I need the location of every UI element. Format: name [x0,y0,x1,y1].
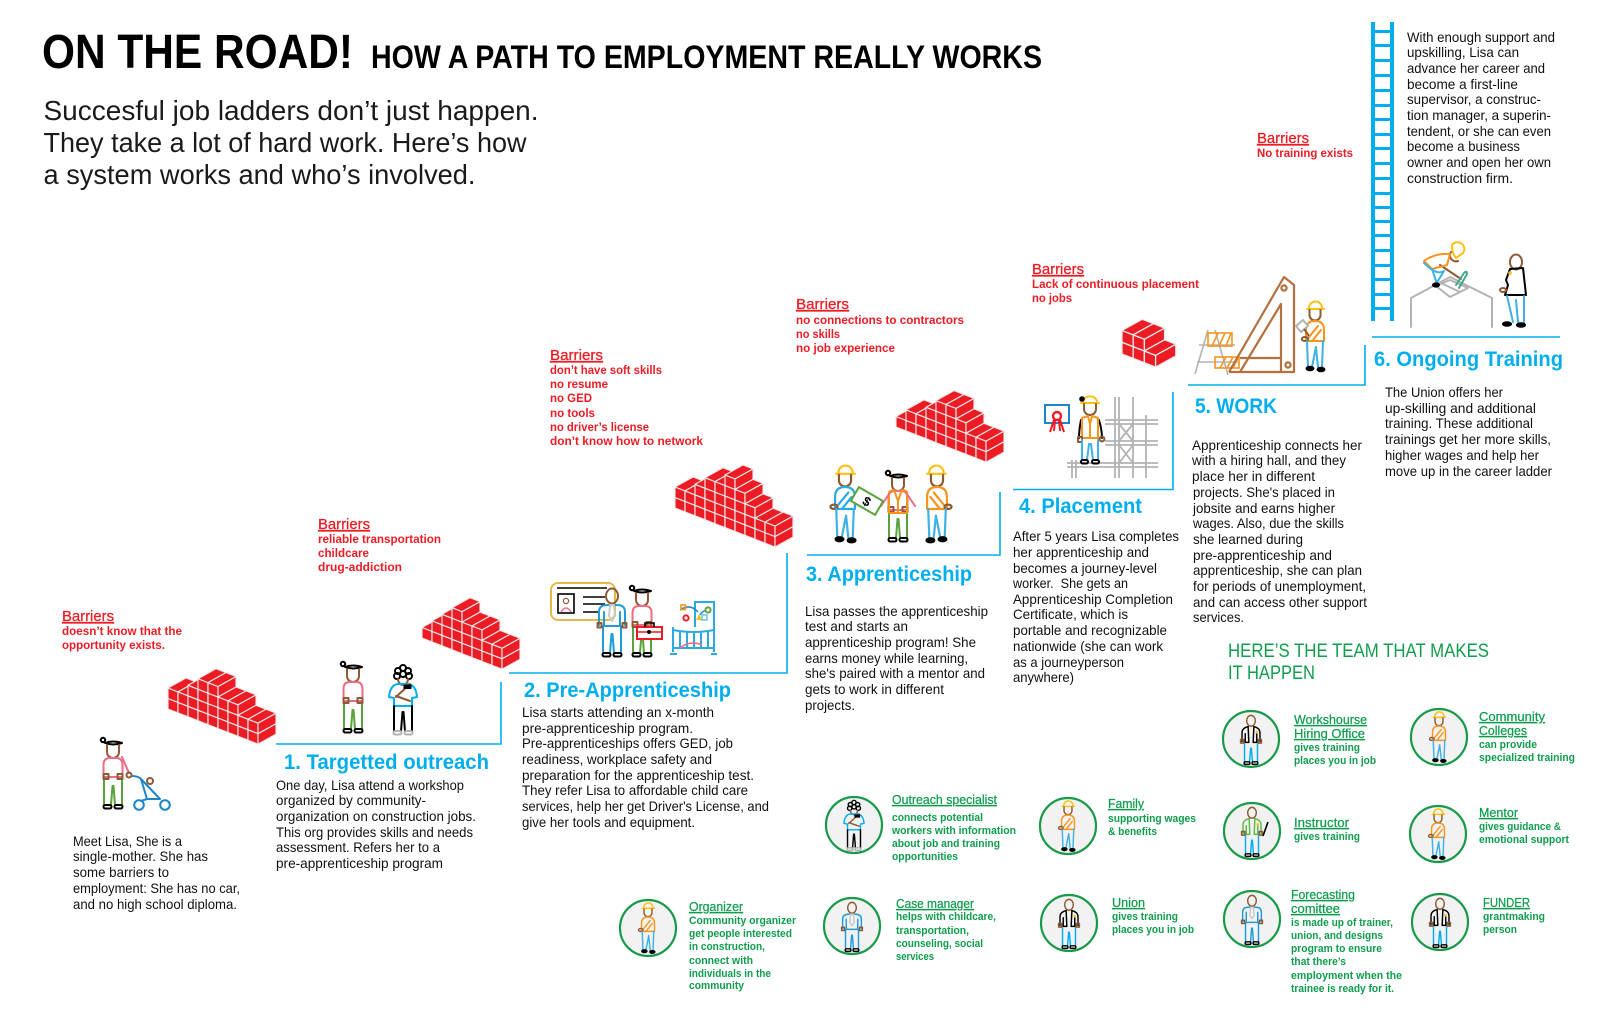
text: step 2: preparation for the apprenticeship test. [522,767,754,783]
barriers: step 4: Barriers [1032,261,1084,278]
barriers: step 2: no GED [550,393,592,405]
text: step 1: pre-apprenticeship program [276,855,443,871]
text: career advance: With enough support and [1407,29,1555,45]
team: funder [1412,894,1545,950]
text: step 1: This org provides skills and needs [276,824,473,840]
text: step 1: assessment. Refers her to a [276,839,440,855]
brick wall 2 [675,465,793,547]
text: step 4: Certificate, which is [1013,606,1128,622]
team: outreach specialist: workers with information [891,825,1016,837]
icon: crib with mobile [670,602,717,654]
team heading: IT HAPPEN [1228,663,1315,684]
team heading [1228,641,1489,684]
text: meet Lisa [73,833,240,912]
text: meet Lisa: employment: She has no car, [73,880,240,896]
team: organizer: get people interested [689,928,792,940]
text: step 4: nationwide (she can work [1013,638,1164,654]
text: career advance: owner and open her own [1407,154,1551,170]
text: career advance: become a first-line [1407,76,1518,92]
step line 3 [807,492,1000,555]
panel: step 3 apprenticeship [796,296,1004,713]
panel: meet Lisa [62,608,276,912]
text: step 2 [522,704,769,830]
text: career advance: construction firm. [1407,170,1513,186]
text: step 5: wages. Also, due the skills [1192,515,1344,531]
text: step 6: The Union offers her [1385,384,1503,400]
text: step 2: services, help her get Driver's License, and [522,798,769,814]
icon: Lisa with stroller [101,738,170,810]
team: community colleges: Colleges [1479,723,1527,738]
barriers: step 6: No training exists [1257,148,1353,160]
barriers: opportunity: opportunity exists. [62,640,165,652]
team: forecasting comittee: Forecasting [1291,887,1355,902]
brick wall 1 [422,598,520,669]
barriers: step 2: no driver’s license [550,422,649,434]
team: forecasting comittee: employment when the [1291,970,1402,982]
team: mentor: emotional support [1479,834,1569,846]
barriers: step 1 [318,516,441,574]
text: step 2: readiness, workplace safety and [522,751,712,767]
brick wall 3 [896,391,1004,462]
text: step 2: Pre-apprenticeships offers GED, job [522,735,733,751]
team: union: Union [1112,895,1145,910]
barriers: step 4: no jobs [1032,293,1072,305]
icon: certificate [1045,405,1069,432]
text: step 1: organization on construction jobs. [276,808,476,824]
text: step 5: services. [1193,609,1244,625]
team: family: supporting wages [1108,813,1196,825]
barriers: step 3: no job experience [796,343,895,355]
barriers: step 1: reliable transportation [318,534,441,546]
barriers: step 3 [796,296,964,355]
text: step 3: projects. [805,697,855,713]
text: step 2: They refer Lisa to affordable child care [522,782,748,798]
step line 6 [1372,336,1560,338]
team: case manager: services [896,951,934,963]
text: meet Lisa: Meet Lisa, She is a [73,833,182,849]
team: organizer: connect with [689,955,753,967]
team: instructor [1224,803,1360,859]
text: step 3: Lisa passes the apprenticeship [805,603,988,619]
text: step 5: place her in different [1192,468,1315,484]
text: step 6: trainings get her more skills, [1385,431,1551,447]
icon: timber brace [1229,277,1294,372]
text: step 5: with a hiring hall, and they [1191,452,1346,468]
barriers: step 6 [1257,130,1353,160]
text: step 5: she learned during [1193,531,1303,547]
text: step 4: Apprenticeship Completion [1013,591,1173,607]
text: career advance [1407,29,1555,186]
text: career advance: tion manager, a superin- [1407,107,1551,123]
icon: barricade [1195,330,1239,375]
panel: step 6 ongoing training [1257,22,1563,479]
icon: ID card [551,583,615,620]
team: forecasting comittee: trainee is ready for it. [1291,983,1394,995]
icon: scaffold [1067,397,1158,478]
team: forecasting comittee: program to ensure [1291,943,1382,955]
team: workshourse hiring office: gives training [1294,742,1360,754]
text: meet Lisa: single-mother. She has [73,848,208,864]
text: step 3: she's paired with a mentor and [805,665,985,681]
team: organizer: community [689,980,745,992]
heading 6: 6. Ongoing Training [1374,348,1563,371]
step line 5 [1188,345,1365,385]
team heading: HERE’S THE TEAM THAT MAKES [1228,641,1489,662]
brick wall 0 [168,669,276,744]
team: forecasting comittee: union, and designs [1291,930,1383,942]
brick wall 4 [1122,319,1176,367]
icon: roofer and supervisor [1411,242,1526,327]
heading 1: 1. Targetted outreach [284,751,489,774]
barriers: step 3: no connections to contractors [796,315,964,327]
team: family: & benefits [1108,826,1157,838]
barriers: opportunity: doesn’t know that the [62,626,182,638]
icon: handshake with pay [830,466,952,542]
team: instructor: Instructor [1294,815,1350,830]
title: ON THE ROAD! [42,26,353,79]
text: meet Lisa: and no high school diploma. [73,896,237,912]
text: career advance: tendent, or she can even [1407,123,1551,139]
team: funder: FUNDER [1483,895,1530,910]
text: step 5: and can access other support [1193,594,1367,610]
team: community colleges: can provide [1479,739,1537,751]
text: step 4: After 5 years Lisa completes [1013,528,1179,544]
team: community colleges: Community [1479,709,1545,724]
text: step 6: higher wages and help her [1385,447,1539,463]
step line 1 [276,682,501,744]
team: forecasting comittee: comittee [1291,901,1340,916]
team: workshourse hiring office: Workshourse [1294,712,1367,727]
team: funder: grantmaking [1483,911,1545,923]
team: forecasting comittee: that there’s [1291,956,1346,968]
heading 4: 4. Placement [1019,495,1142,518]
text: step 1 [276,777,476,871]
title: HOW A PATH TO EMPLOYMENT REALLY WORKS [371,39,1042,75]
team: community colleges: specialized training [1479,752,1575,764]
text: step 5: apprenticeship, she can plan [1193,562,1362,578]
team: case manager: counseling, social [896,938,983,950]
text: career advance: upskilling, Lisa can [1407,44,1519,60]
team: union [1041,895,1194,951]
text: step 4: anywhere) [1013,669,1074,685]
text: step 3: gets to work in different [805,681,944,697]
text: step 5 [1191,437,1367,625]
text: step 2: Lisa starts attending an x-month [522,704,714,720]
team: organizer: in construction, [689,941,765,953]
barriers: step 1: childcare [318,548,369,560]
text: step 4: portable and recognizable [1013,622,1167,638]
barriers: step 2: don’t have soft skills [550,365,662,377]
barriers: step 1: drug-addiction [318,562,402,574]
team: mentor: Mentor [1479,805,1519,820]
text: step 4: worker. She gets an [1012,575,1128,591]
text: step 3 [805,603,988,713]
team: mentor [1410,805,1569,862]
team: family: Family [1108,796,1144,811]
heading 5: 5. WORK [1195,395,1277,418]
team: community colleges [1411,709,1575,765]
team: outreach specialist: about job and training [892,838,1000,850]
team: case manager: transportation, [896,925,969,937]
barriers: step 2 [550,347,704,448]
text: step 5: for periods of unemployment, [1193,578,1366,594]
barriers: step 3: no skills [796,329,840,341]
panel: step 1 targetted outreach [276,516,520,871]
text: step 5: jobsite and earns higher [1192,500,1335,516]
intro text [44,95,538,190]
barriers: step 2: no tools [550,408,595,420]
barriers: step 4 [1032,261,1199,305]
team: workshourse hiring office: Hiring Office [1294,726,1365,741]
icon: journey-level worker [1078,396,1104,464]
team: outreach specialist: Outreach specialist [892,792,997,807]
text: step 4 [1012,528,1179,685]
text: step 5: Apprenticeship connects her [1192,437,1362,453]
text: meet Lisa: some barriers to [73,864,169,880]
intro text: They take a lot of hard work. Here’s how [44,127,527,158]
text: step 3: apprenticeship program! She [805,634,976,650]
icon: handshake with pay: $ [860,493,874,510]
text: step 4: her apprenticeship and [1013,544,1149,560]
team: organizer [620,899,797,992]
intro text: a system works and who’s involved. [44,159,476,190]
panel: step 2 pre-apprenticeship [509,347,793,830]
team: union: gives training [1112,911,1178,923]
step line 2 [509,553,787,673]
icon: case manager and Lisa with toolbox [598,586,662,656]
team: case manager [824,896,996,963]
step line 4 [1013,392,1173,490]
barriers: opportunity [62,608,182,652]
team: union: places you in job [1112,924,1194,936]
intro text: Succesful job ladders don’t just happen. [44,95,538,126]
text: step 1: organized by community- [276,792,426,808]
team: workshourse hiring office: places you in job [1294,755,1376,767]
text: step 5: pre-apprenticeship and [1193,547,1332,563]
team: outreach specialist: opportunities [892,851,958,863]
barriers: step 1: Barriers [318,516,370,533]
text: step 3: earns money while learning, [805,650,968,666]
title [42,26,1042,79]
text: step 6 [1385,384,1552,479]
team: mentor: gives guidance & [1479,821,1561,833]
text: step 6: training. These additional [1385,415,1533,431]
heading 2: 2. Pre-Apprenticeship [524,679,731,702]
barriers: step 2: no resume [550,379,608,391]
text: step 2: give her tools and equipment. [522,814,695,830]
panel: step 4 placement [1012,261,1199,685]
text: step 4: becomes a journey-level [1013,560,1157,576]
team: forecasting comittee: is made up of trainer, [1291,917,1393,929]
heading 3: 3. Apprenticeship [806,563,972,586]
team: instructor: gives training [1294,831,1360,843]
team: case manager: Case manager [896,896,975,911]
barriers: step 6: Barriers [1257,130,1309,147]
icon: worker with hammer [1296,302,1324,371]
text: step 4: as a journeyperson [1013,654,1124,670]
team: organizer: Community organizer [689,915,797,927]
text: career advance: advance her career and [1407,60,1545,76]
text: career advance: supervisor, a construc- [1407,91,1541,107]
team: family [1040,796,1196,854]
team: forecasting comittee [1224,887,1402,995]
team: outreach specialist: connects potential [892,812,983,824]
icon: Lisa and outreach specialist [341,662,417,734]
text: step 6: move up in the career ladder [1385,463,1552,479]
text: step 5: projects. She's placed in [1193,484,1335,500]
team: organizer: individuals in the [689,968,771,980]
team: organizer: Organizer [689,899,744,914]
barriers: opportunity: Barriers [62,608,114,625]
team: outreach specialist [826,792,1016,863]
barriers: step 2: don’t know how to network [550,436,704,448]
text: step 2: pre-apprenticeship program. [522,720,693,736]
barriers: step 2: Barriers [550,347,603,364]
text: career advance: become a business [1407,138,1520,154]
icon: career ladder [1371,22,1394,321]
barriers: step 4: Lack of continuous placement [1032,279,1199,291]
barriers: step 3: Barriers [796,296,849,313]
team: workshourse hiring office [1223,711,1376,767]
text: step 3: test and starts an [805,618,908,634]
team: funder: person [1483,924,1517,936]
team: case manager: helps with childcare, [896,911,996,923]
text: step 1: One day, Lisa attend a workshop [276,777,464,793]
text: step 6: up-skilling and additional [1385,400,1536,416]
panel: step 5 work [1188,277,1367,625]
